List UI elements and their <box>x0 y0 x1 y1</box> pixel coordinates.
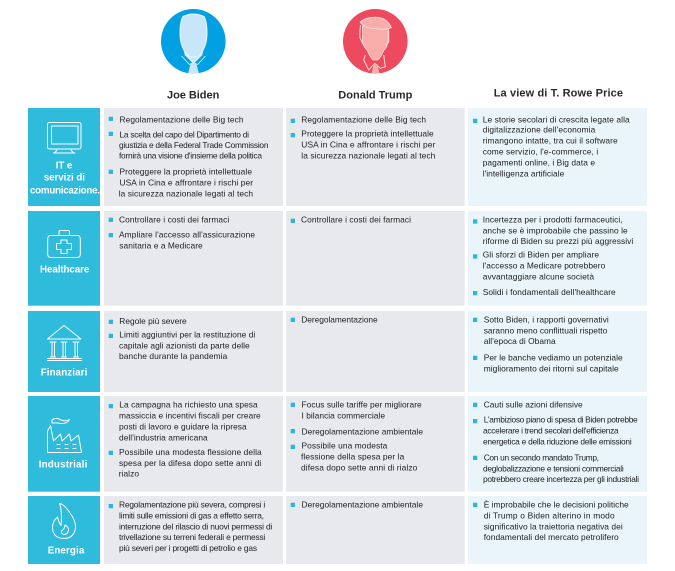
label: Industriali: Industriali <box>39 460 88 471</box>
bullet item <box>291 129 436 161</box>
row label panel: Finanziari <box>28 311 100 392</box>
panel: Trump, Industriali <box>286 396 465 492</box>
bullet item: Regolamentazione più severa, compresi i <box>119 500 265 510</box>
bullet item <box>473 115 630 179</box>
bullet item: accelerare i trend secolari dell'efficienza <box>483 426 619 436</box>
bullet item: Per le banche vediamo un potenziale <box>484 352 623 362</box>
panel: Trump, IT <box>286 108 465 206</box>
heading: Joe Biden: Joe Biden <box>167 90 220 102</box>
bullet item <box>109 500 272 553</box>
bullet item: miglioramento dei ritorni sul capitale <box>484 363 619 373</box>
bullet item <box>473 452 639 484</box>
bullet item: di Trump o Biden alterino in modo <box>484 511 615 521</box>
bullet item: Possibile una modesta flessione della <box>119 447 262 457</box>
bullet item: Deregolamentazione ambientale <box>302 427 423 437</box>
bullet item: più severi per i progetti di petrolio e gas <box>119 543 257 553</box>
bullet item: come servizio, l'e-commerce, i <box>483 147 598 157</box>
bullet item <box>291 440 418 472</box>
bullet item: La scelta del capo del Dipartimento di <box>120 130 249 140</box>
bullet item: limiti sulle emissioni di gas a effetto serra, <box>119 511 264 521</box>
bullet item <box>473 352 623 373</box>
bullet item: anche se è improbabile che passino le <box>483 226 628 236</box>
bullet item: Sotto Biden, i rapporti governativi <box>484 315 609 325</box>
bullet item: Cauti sulle azioni difensive <box>484 400 583 410</box>
bullet item: difesa dopo sette anni di rialzo <box>301 462 418 472</box>
row label panel: IT e servizi di comunicazione <box>28 108 100 206</box>
bullet item: Controllare i costi dei farmaci <box>301 215 411 225</box>
panel: Biden, Industriali <box>104 396 283 492</box>
bullet item: giustizia e della Federal Trade Commission <box>119 140 269 150</box>
bullet item <box>473 215 633 246</box>
bullet item: USA in Cina e affrontare i rischi per <box>120 178 253 188</box>
portrait: Joe Biden <box>161 9 226 74</box>
bullet item: Controllare i costi dei farmaci <box>119 215 229 225</box>
bullet item: Incertezza per i prodotti farmaceutici, <box>483 215 623 225</box>
panel: Trump, Energia <box>286 496 465 564</box>
row label panel: Industriali <box>28 396 100 492</box>
bullet item <box>109 230 255 251</box>
bullet item: avvantaggiare alcune società <box>483 272 594 282</box>
bullet item: riforme di Biden su prezzi più aggressivi <box>483 236 633 246</box>
bullet item <box>109 330 255 361</box>
bullet item: la sicurezza nazionale legati al tech <box>301 151 436 161</box>
label: IT e servizi di comunicazione: comunicazione. <box>30 185 100 196</box>
bullet item: spesa per la difesa dopo sette anni di <box>119 458 261 468</box>
bullet item: Deregolamentazione ambientale <box>302 500 423 510</box>
panel: Biden, Energia <box>104 496 283 564</box>
panel: Biden, IT <box>104 108 283 206</box>
bullet item: Regolamentazione delle Big tech <box>301 114 426 124</box>
label: IT e servizi di comunicazione: IT e <box>56 160 73 171</box>
bullet item <box>109 130 269 161</box>
bullet item: dell'industria americana <box>119 433 208 443</box>
bullet item: pagamenti online, i Big data e <box>483 158 595 168</box>
bullet item: banche durante la pandemia <box>119 351 228 361</box>
bullet item: flessione della spesa per la <box>301 451 405 461</box>
label: IT e servizi di comunicazione <box>30 160 100 196</box>
heading: Donald Trump: Donald Trump <box>338 90 413 102</box>
bullet item: Con un secondo mandato Trump, <box>484 452 599 462</box>
bullet item: Gli sforzi di Biden per ampliare <box>483 250 599 260</box>
icon: bank building <box>48 326 82 360</box>
bullet item: Ampliare l'accesso all'assicurazione <box>119 230 255 240</box>
label: IT e servizi di comunicazione: servizi di <box>44 173 85 184</box>
bullet item: I bilancia commerciale <box>302 411 385 421</box>
bullet item: rimangono intatte, tra cui il software <box>483 136 618 146</box>
bullet item: massiccia e incentivi fiscali per creare <box>119 411 261 421</box>
bullet item: l'accesso a Medicare potrebbero <box>483 261 606 271</box>
bullet item: la sicurezza nazionale legati al tech <box>119 189 253 199</box>
bullet item: all'epoca di Obama <box>484 336 556 346</box>
bullet item <box>473 250 606 282</box>
heading: La view di T. Rowe Price: La view di T. Rowe Price <box>494 88 623 100</box>
icon: flame <box>52 504 76 538</box>
bullet item: saranno meno conflittuali rispetto <box>484 326 608 336</box>
bullet item: capitale agli azionisti da parte delle <box>119 341 250 351</box>
bullet item: significativo la traiettoria negativa dei <box>484 522 623 532</box>
icon: first aid kit <box>48 230 80 258</box>
bullet item: Regolamentazione delle Big tech <box>120 114 244 124</box>
label: Healthcare: Healthcare <box>40 265 90 276</box>
panel: Trump, Healthcare <box>286 211 465 306</box>
bullet item: l'intelligenza artificiale <box>483 169 565 179</box>
panel: T. Rowe Price view, Energia <box>468 496 647 564</box>
icon: computer monitor <box>48 122 81 153</box>
bullet item: deglobalizzazione e tensioni commerciali <box>483 463 624 473</box>
panel: T. Rowe Price view, Healthcare <box>468 211 647 306</box>
bullet item <box>473 415 638 447</box>
bullet item: Proteggere la proprietà intellettuale <box>120 167 252 177</box>
bullet item <box>109 167 253 199</box>
bullet item: interruzione del rilascio di nuovi permessi di <box>119 522 272 532</box>
bullet item: Solidi i fondamentali dell'healthcare <box>483 287 616 297</box>
row label panel: Healthcare <box>28 211 100 306</box>
bullet item: energetica e della riduzione delle emissioni <box>483 437 632 447</box>
panel: T. Rowe Price view, Industriali <box>468 396 647 492</box>
bullet item: Focus sulle tariffe per migliorare <box>302 400 422 410</box>
label: Energia: Energia <box>48 546 85 557</box>
bullet item: La campagna ha richiesto una spesa <box>119 400 258 410</box>
panel: Biden, Finanziari <box>104 311 283 392</box>
bullet item: Le storie secolari di crescita legate alla <box>483 115 630 125</box>
bullet item <box>473 315 609 346</box>
bullet item <box>109 400 261 443</box>
icon: factory <box>48 418 82 452</box>
bullet item: Regole più severe <box>119 316 187 326</box>
bullet item: digitalizzazione dell'economia <box>483 125 596 135</box>
row label panel: Energia <box>28 496 100 564</box>
bullet item: potrebbero creare incertezza per gli industriali <box>483 474 639 484</box>
panel: Biden, Healthcare <box>104 211 283 306</box>
bullet item: Proteggere la proprietà intellettuale <box>301 129 434 139</box>
bullet item: Possibile una modesta <box>302 440 388 450</box>
bullet item: Limiti aggiuntivi per la restituzione di <box>119 330 255 340</box>
bullet item: USA in Cina e affrontare i rischi per <box>301 140 436 150</box>
bullet item: sanitaria e a Medicare <box>119 241 203 251</box>
bullet item <box>109 447 262 479</box>
label: Finanziari: Finanziari <box>41 367 88 378</box>
portrait: Donald Trump <box>343 9 408 74</box>
bullet item: È improbabile che le decisioni politiche <box>484 500 629 510</box>
panel: T. Rowe Price view, IT <box>468 108 647 206</box>
bullet item: fornirà una visione d'insieme della politica <box>119 151 262 161</box>
bullet item: trivellazione su terreni federali e permessi <box>119 532 265 542</box>
panel: Trump, Finanziari <box>286 311 465 392</box>
panel: T. Rowe Price view, Finanziari <box>468 311 647 392</box>
bullet item: posti di lavoro e guidare la ripresa <box>119 422 247 432</box>
bullet item: rialzo <box>119 469 139 479</box>
bullet item: L'ambizioso piano di spesa di Biden potrebbe <box>484 415 638 425</box>
bullet item: Deregolamentazione <box>301 315 378 325</box>
bullet item <box>473 500 629 542</box>
bullet item <box>291 400 422 421</box>
bullet item: fondamentali del mercato petrolifero <box>484 532 619 542</box>
